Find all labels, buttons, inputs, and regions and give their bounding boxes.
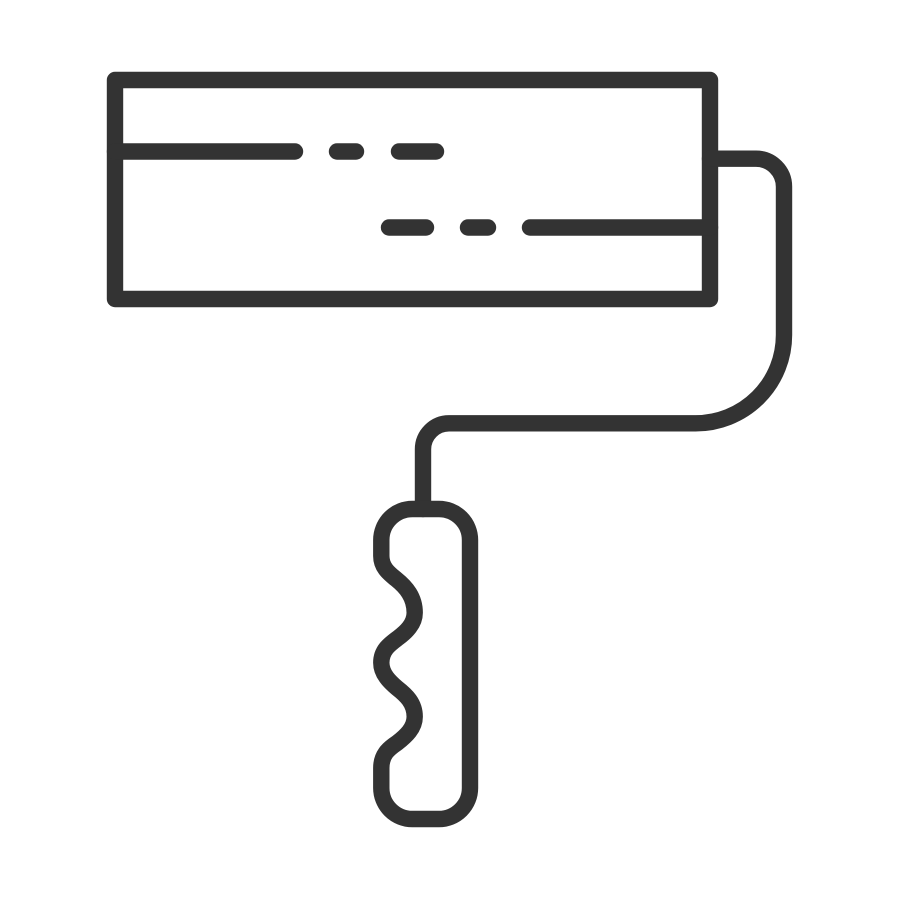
roller body [115,80,710,299]
roller paint line: upper [115,143,436,160]
handle grip [381,509,470,819]
roller paint line: lower [389,219,710,236]
roller arm [423,159,784,509]
